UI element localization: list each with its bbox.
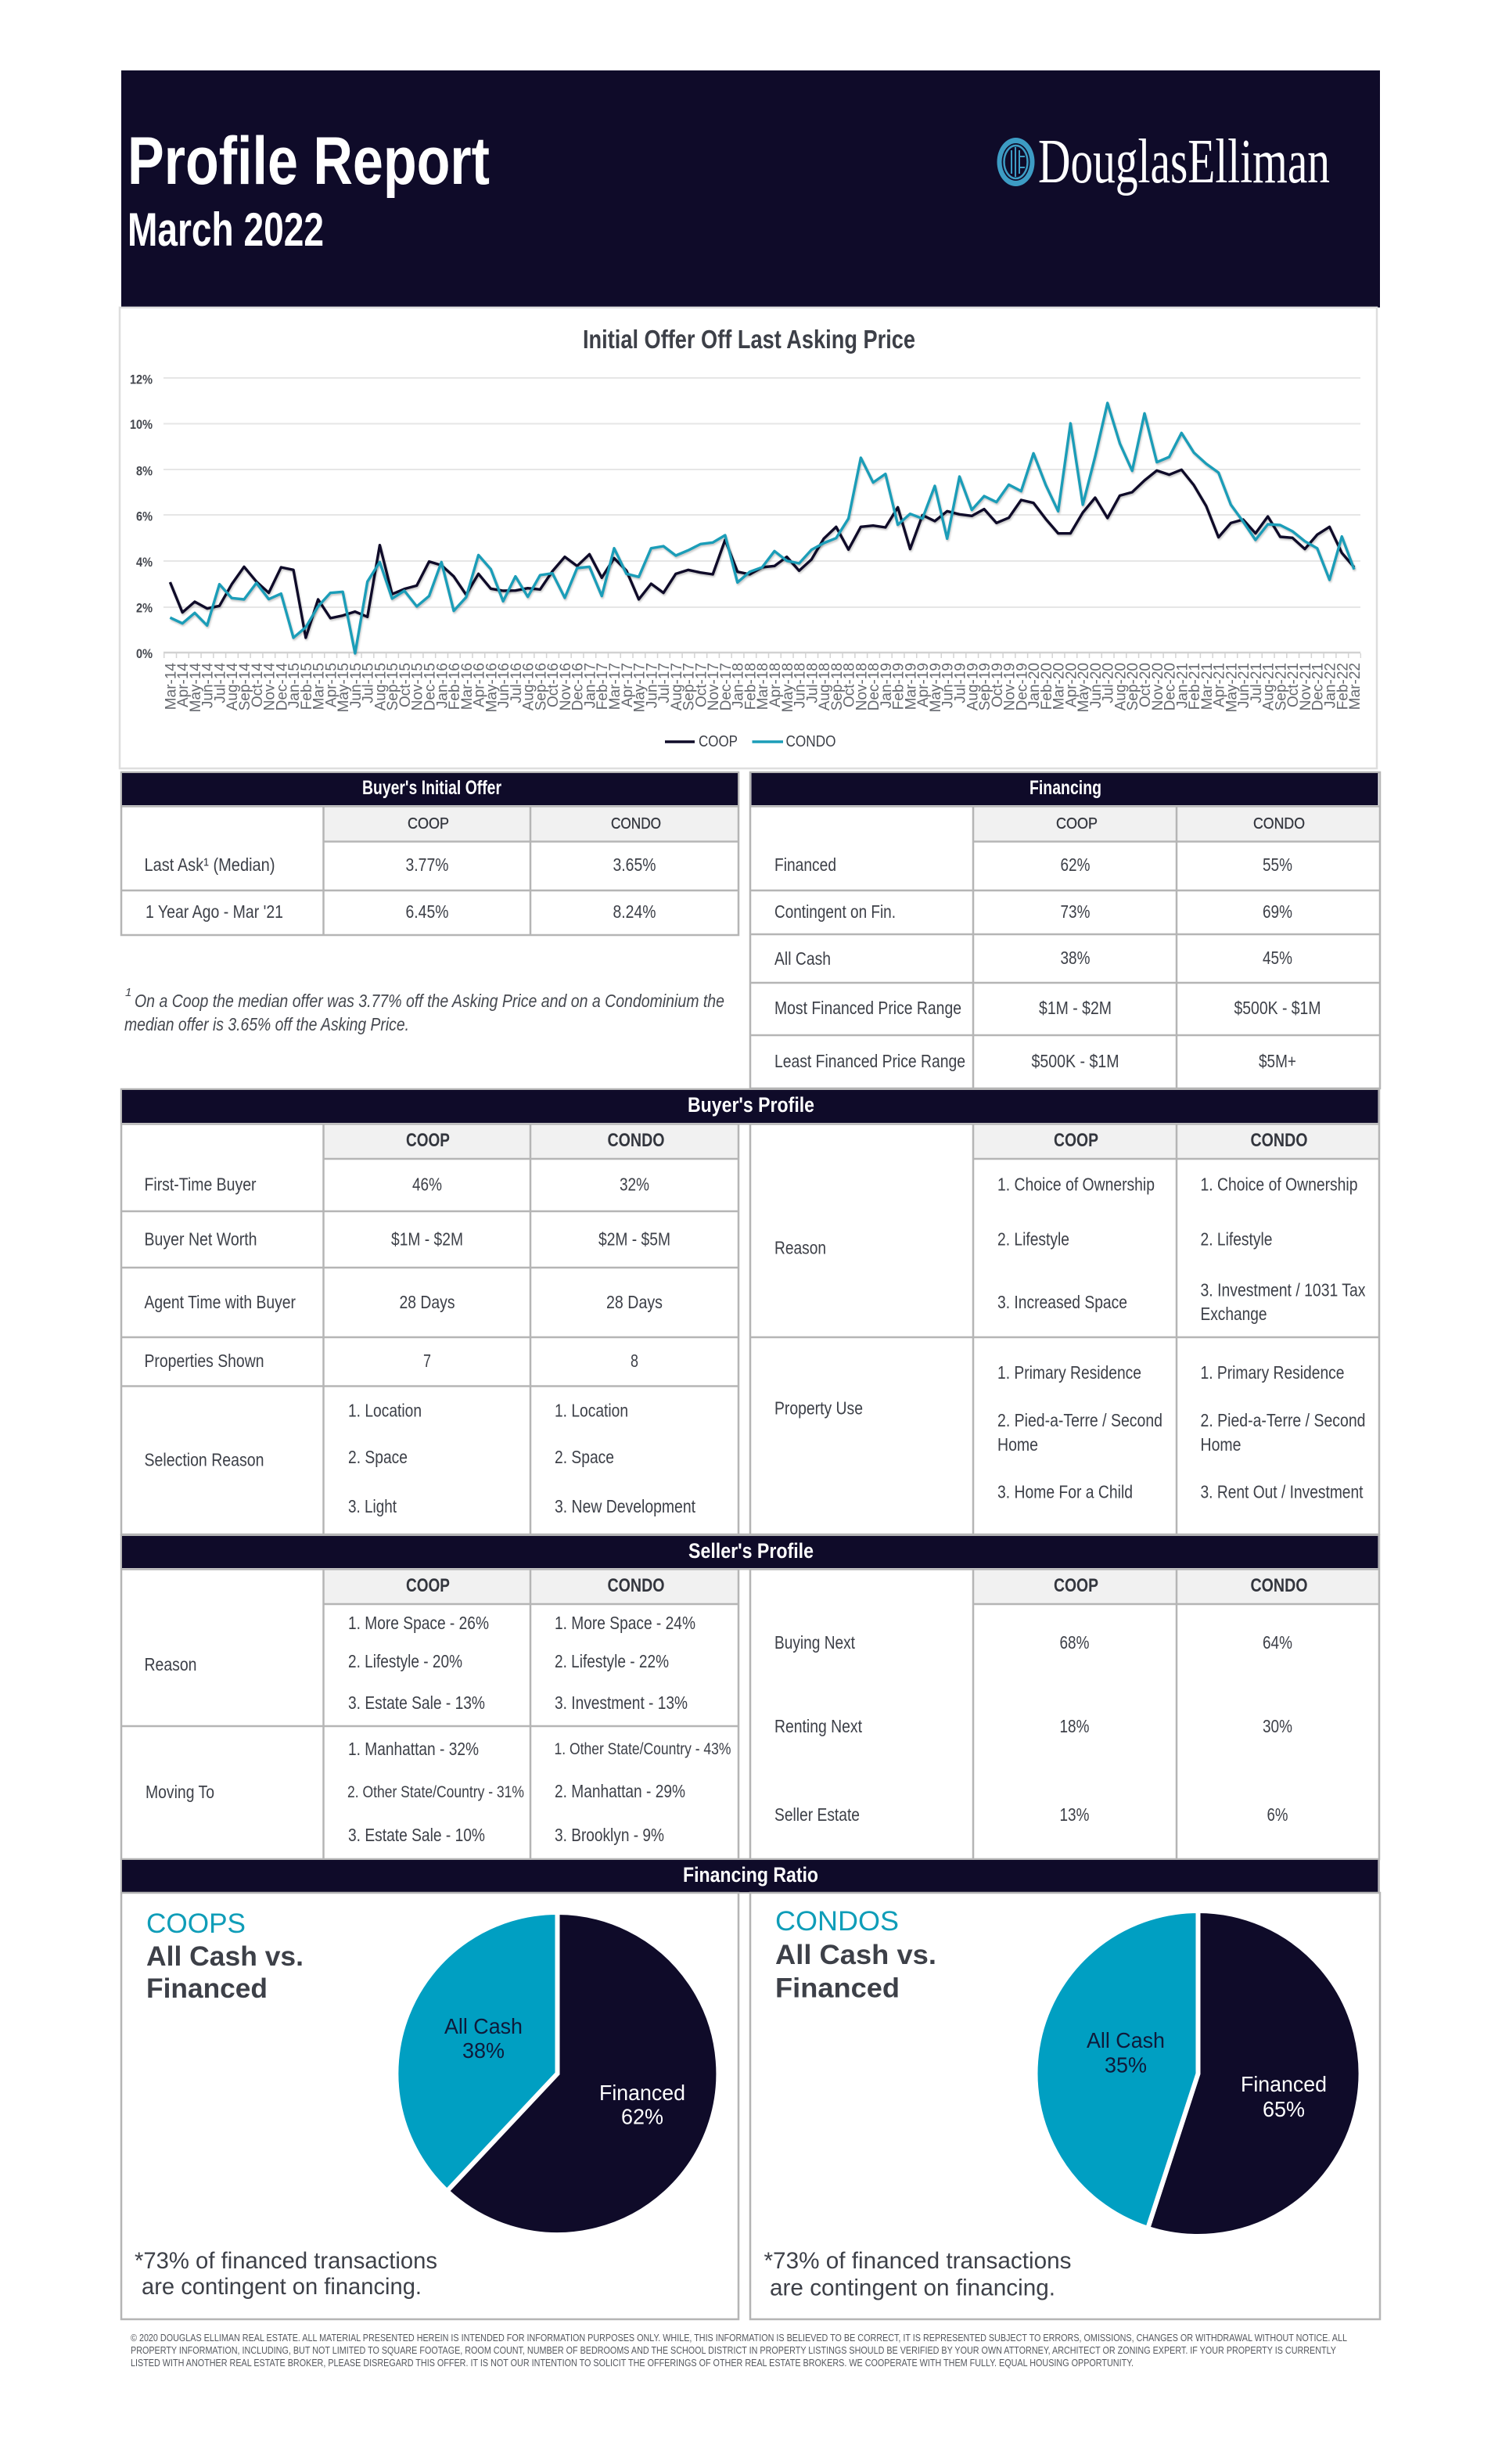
row: contingent	[774, 901, 1292, 922]
x axis month labels: May-15	[336, 663, 352, 712]
pie chart: coops: Financed	[599, 2081, 685, 2105]
panel: condos pie	[750, 1893, 1380, 2319]
row: reason: Exchange	[1200, 1304, 1267, 1324]
x axis month labels: Dec-18	[866, 663, 882, 710]
x axis month labels: Sep-16	[533, 663, 549, 710]
row: selection reason: 1. Location	[555, 1401, 628, 1421]
row: moving to: 2. Manhattan - 29%	[555, 1781, 685, 1801]
row: reason: 1. More Space - 24%	[555, 1613, 695, 1633]
x axis month labels: Sep-21	[1273, 663, 1289, 710]
x axis month labels: Mar-22	[1347, 663, 1364, 710]
x axis month labels: Aug-21	[1261, 663, 1277, 710]
x axis month labels: Jun-19	[940, 663, 957, 708]
row: property use: 3. Home For a Child	[997, 1482, 1133, 1502]
y axis labels: 12%	[130, 372, 153, 387]
row: first-time buyer: 46%	[412, 1174, 442, 1195]
x axis month labels: Mar-19	[903, 663, 919, 710]
line: CONDO series	[170, 403, 1354, 653]
y axis labels: 2%	[136, 601, 153, 616]
row: buying next	[774, 1632, 1292, 1653]
x axis month labels: Dec-20	[1162, 663, 1178, 710]
row: property use: Home	[1200, 1434, 1241, 1455]
panel: condos pie: are contingent on financing.	[770, 2275, 1055, 2300]
panel: Seller's Profile: COOP	[1054, 1575, 1098, 1596]
x axis month labels: Dec-19	[1014, 663, 1030, 710]
x axis month labels: Oct-17	[693, 663, 710, 707]
x axis month labels: Dec-17	[718, 663, 735, 710]
panel: Seller's Profile: CONDO	[1250, 1575, 1308, 1596]
header banner	[121, 70, 1380, 308]
x axis month labels: Nov-20	[1150, 663, 1166, 710]
panel: Buyer's Initial Offer table: CONDO	[611, 815, 661, 833]
row: property use	[774, 1362, 1366, 1502]
row: buying next: Buying Next	[774, 1632, 855, 1653]
heading: Financing Ratio	[683, 1863, 818, 1887]
x axis month labels: Feb-22	[1335, 663, 1351, 710]
row: moving to: 3. Brooklyn - 9%	[555, 1825, 664, 1845]
heading: Seller's Profile	[688, 1539, 814, 1563]
pie chart: condos: 35%	[1105, 2053, 1147, 2077]
row: 1 year ago	[146, 901, 656, 922]
panel: Buyer's Profile: CONDO	[1250, 1130, 1308, 1151]
panel: Buyer's Profile: COOP	[406, 1130, 450, 1151]
row: properties shown: 8	[631, 1351, 638, 1371]
x axis month labels: Oct-14	[250, 663, 266, 707]
panel: coops pie: *73% of financed transactions	[135, 2248, 437, 2274]
row: least financed: $5M+	[1259, 1051, 1296, 1071]
row: contingent: 73%	[1061, 901, 1091, 922]
row: most financed: $1M - $2M	[1039, 998, 1112, 1018]
panel: Financing Ratio	[121, 1859, 1380, 2319]
y axis labels: 6%	[136, 509, 153, 524]
x axis month labels: Jan-18	[731, 663, 747, 708]
x axis month labels: Aug-17	[669, 663, 685, 710]
panel: Seller's Profile: CONDO	[607, 1575, 665, 1596]
row: first-time buyer: 32%	[620, 1174, 649, 1195]
row: first-time buyer: First-Time Buyer	[144, 1174, 257, 1195]
row: renting next	[774, 1716, 1292, 1736]
x axis month labels: Nov-16	[558, 663, 574, 710]
row: buyer net worth: Buyer Net Worth	[144, 1229, 257, 1250]
x axis month labels: Apr-15	[323, 663, 340, 707]
panel: Buyer's Profile: COOP	[1054, 1130, 1098, 1151]
row: property use: 3. Rent Out / Investment	[1200, 1482, 1364, 1502]
x axis month labels: Aug-18	[817, 663, 833, 710]
row: agent time: 28 Days	[399, 1292, 455, 1312]
row: buyer net worth: $1M - $2M	[391, 1229, 463, 1250]
x axis month labels: Jan-16	[434, 663, 451, 708]
x axis month labels: Feb-17	[595, 663, 611, 710]
x axis month labels: Jun-16	[496, 663, 512, 708]
x axis month labels: Jun-15	[348, 663, 365, 708]
subtitle: March 2022: March 2022	[128, 203, 324, 256]
row: property use: 1. Primary Residence	[997, 1362, 1141, 1383]
x axis month labels: Nov-17	[706, 663, 722, 710]
row: property use: 1. Primary Residence	[1200, 1362, 1344, 1383]
x axis month labels: Apr-19	[915, 663, 932, 707]
x axis month labels: Apr-18	[767, 663, 784, 707]
footnote: On a Coop the median offer was 3.77% off the Asking Price and on a Condominium the	[135, 991, 724, 1011]
heading: Buyer's Initial Offer	[362, 777, 501, 799]
row: most financed	[774, 998, 1321, 1018]
x axis month labels: Jan-19	[879, 663, 895, 708]
row: most financed: Most Financed Price Range	[774, 998, 961, 1018]
x axis month labels: Jun-14	[200, 663, 217, 708]
y axis labels: 8%	[136, 464, 153, 479]
row: selection reason: 3. New Development	[555, 1496, 696, 1516]
x axis month labels: Jun-17	[644, 663, 660, 708]
x axis month labels: Jul-18	[804, 663, 821, 703]
row: reason	[774, 1174, 1366, 1324]
row: moving to: 1. Manhattan - 32%	[348, 1739, 479, 1759]
x axis month labels: Feb-19	[891, 663, 907, 710]
x axis month labels: Sep-14	[237, 663, 253, 710]
panel: line chart Initial Offer Off Last Asking Price	[120, 308, 1377, 768]
x axis month labels: Jan-22	[1322, 663, 1339, 708]
row: reason: 3. Investment / 1031 Tax	[1200, 1280, 1366, 1300]
row: seller estate: Seller Estate	[774, 1804, 860, 1825]
row: reason: 3. Estate Sale - 13%	[348, 1692, 485, 1713]
row: reason: 1. Choice of Ownership	[997, 1174, 1155, 1195]
row: selection reason: Selection Reason	[144, 1450, 264, 1470]
x axis month labels: Sep-17	[681, 663, 698, 710]
line: COOP series	[170, 469, 1354, 638]
panel: condos pie: CONDOS	[775, 1906, 899, 1937]
x axis month labels: Apr-20	[1063, 663, 1080, 707]
panel: condos pie: Financed	[775, 1973, 900, 2003]
x axis month labels: Jun-20	[1088, 663, 1105, 708]
panel: Seller's Profile	[120, 1535, 1380, 1859]
x axis month labels: May-14	[188, 663, 204, 712]
panel: Financing table: CONDO	[1253, 815, 1305, 833]
x axis month labels: Aug-14	[225, 663, 241, 710]
x axis month labels: Sep-15	[385, 663, 401, 710]
x axis month labels: Mar-21	[1199, 663, 1216, 710]
row: moving to: 1. Other State/Country - 43%	[554, 1740, 731, 1758]
row: seller estate: 13%	[1059, 1804, 1089, 1825]
x axis month labels: May-18	[780, 663, 796, 712]
row: properties shown: 7	[423, 1351, 431, 1371]
row: agent time: Agent Time with Buyer	[144, 1292, 296, 1312]
legal disclaimer: PROPERTY INFORMATION, INCLUDING, BUT NOT LIMITED TO SQUARE FOOTAGE, ROOM COUNT, NUMBER OF BEDROOMS AND THE SCHOOL DISTRICT IN PROPERTY LISTINGS SHOULD BE VERIFIED BY YOUR OWN ATTORNEY, ARCHITECT OR ZONING EXPERT. IF YOUR PROPERTY IS CURRENTLY	[131, 2345, 1337, 2356]
x axis month labels: Jan-20	[1026, 663, 1043, 708]
row: reason: Reason	[144, 1654, 197, 1674]
row: renting next: 30%	[1263, 1716, 1292, 1736]
row: moving to: 3. Estate Sale - 10%	[348, 1825, 485, 1845]
x axis month labels: Oct-19	[990, 663, 1006, 707]
x axis month labels: Nov-15	[410, 663, 426, 710]
x axis month labels: Jan-21	[1174, 663, 1191, 708]
legal disclaimer: LISTED WITH ANOTHER REAL ESTATE BROKER, PLEASE DISREGARD THIS OFFER. IT IS NOT OUR INTENTION TO SOLICIT THE OFFERINGS OF OTHER REAL ESTATE BROKERS. WE COOPERATE WITH THEM FULLY. EQUAL HOUSING OPPORTUNITY.	[131, 2358, 1134, 2369]
x axis month labels: Feb-16	[447, 663, 463, 710]
row: financed: 62%	[1061, 854, 1091, 875]
x axis month labels	[163, 663, 1364, 712]
footnote: median offer is 3.65% off the Asking Price.	[124, 1014, 409, 1034]
y axis labels: 4%	[136, 555, 153, 570]
x axis month labels: Apr-17	[620, 663, 636, 707]
row: contingent: Contingent on Fin.	[774, 901, 896, 922]
x axis month labels: Jul-20	[1101, 663, 1117, 703]
row: contingent: 69%	[1263, 901, 1292, 922]
x axis month labels: Apr-16	[472, 663, 488, 707]
x axis month labels: Aug-16	[521, 663, 537, 710]
x axis month labels: Sep-19	[977, 663, 994, 710]
pie chart: condos: Financed	[1241, 2072, 1327, 2096]
pie chart: coops	[396, 1912, 718, 2235]
chart legend	[665, 733, 835, 750]
x axis month labels: Jun-18	[792, 663, 809, 708]
row: agent time	[144, 1292, 663, 1312]
x axis month labels: Oct-21	[1285, 663, 1302, 707]
row: reason: 2. Lifestyle - 20%	[348, 1651, 462, 1671]
row: last ask: 3.77%	[405, 854, 449, 875]
logo wordmark: DouglasElliman	[1038, 128, 1330, 196]
x axis month labels: May-17	[632, 663, 648, 712]
row: renting next: Renting Next	[774, 1716, 863, 1736]
row: all cash: All Cash	[774, 948, 831, 969]
row: all cash: 38%	[1061, 948, 1091, 968]
panel: Financing table: COOP	[1056, 815, 1098, 833]
row: property use: Property Use	[774, 1397, 863, 1418]
x axis month labels: Jul-17	[656, 663, 673, 703]
x axis month labels: Dec-14	[274, 663, 290, 710]
pie chart: coops: All Cash	[444, 2014, 523, 2038]
chart title: Initial Offer Off Last Asking Price	[583, 325, 915, 354]
x axis month labels: Oct-18	[842, 663, 858, 707]
row: property use: 2. Pied-a-Terre / Second	[1200, 1410, 1366, 1430]
row: financed: Financed	[774, 854, 836, 875]
row: buyer net worth	[144, 1229, 670, 1250]
row: selection reason: 2. Space	[348, 1447, 408, 1467]
panel: Buyer's Profile: CONDO	[607, 1130, 665, 1151]
row: most financed: $500K - $1M	[1234, 998, 1321, 1018]
panel: Buyer's Initial Offer table	[120, 772, 738, 935]
x axis month labels: Mar-14	[163, 663, 179, 710]
row: reason: 2. Lifestyle	[997, 1229, 1069, 1250]
x axis month labels: Oct-16	[545, 663, 562, 707]
row: selection reason	[144, 1401, 696, 1516]
pie chart: condos	[1036, 1911, 1361, 2236]
row: selection reason: 2. Space	[555, 1447, 614, 1467]
x axis month labels: Jun-21	[1236, 663, 1252, 708]
x axis month labels: May-21	[1224, 663, 1240, 712]
row: first-time buyer	[144, 1174, 649, 1195]
x axis month labels: Jul-21	[1249, 663, 1265, 703]
row: least financed: $500K - $1M	[1031, 1051, 1119, 1071]
row: last ask	[144, 854, 656, 875]
x axis month labels: May-19	[928, 663, 944, 712]
row: moving to: Moving To	[146, 1782, 214, 1802]
row: financed: 55%	[1263, 854, 1292, 875]
row: renting next: 18%	[1059, 1716, 1089, 1736]
row: properties shown	[144, 1351, 638, 1371]
x axis month labels: Aug-20	[1112, 663, 1130, 710]
x axis month labels: Jan-15	[286, 663, 303, 708]
x axis month labels: Nov-14	[261, 663, 278, 710]
x axis month labels: Mar-15	[311, 663, 328, 710]
x axis month labels: Dec-15	[422, 663, 438, 710]
row: last ask: Last Ask¹ (Median)	[144, 854, 275, 875]
row: reason: 1. More Space - 26%	[348, 1613, 489, 1633]
row: financed	[774, 854, 1292, 875]
x axis month labels: Jan-17	[582, 663, 599, 708]
x axis month labels: Jul-16	[508, 663, 525, 703]
pie chart: condos: 65%	[1263, 2097, 1305, 2121]
row: least financed	[774, 1051, 1296, 1071]
heading: Buyer's Profile	[688, 1093, 814, 1117]
x axis month labels: Dec-21	[1310, 663, 1327, 710]
x axis month labels: Mar-18	[755, 663, 771, 710]
panel: coops pie: All Cash vs.	[146, 1941, 304, 1972]
panel: Buyer's Initial Offer table: COOP	[408, 815, 449, 833]
panel: Seller's Profile: COOP	[406, 1575, 450, 1596]
legal disclaimer	[131, 2333, 1347, 2369]
row: buying next: 64%	[1263, 1632, 1292, 1653]
x axis month labels: Feb-18	[742, 663, 759, 710]
chart legend: COOP	[699, 733, 738, 750]
x axis month labels: Jul-19	[953, 663, 968, 703]
row: all cash: 45%	[1263, 948, 1292, 968]
x axis month labels: Apr-14	[175, 663, 192, 707]
row: property use: 2. Pied-a-Terre / Second	[997, 1410, 1162, 1430]
x axis month labels: Jul-15	[361, 663, 377, 703]
pie chart: coops: 38%	[462, 2038, 505, 2063]
row: agent time: 28 Days	[606, 1292, 663, 1312]
x axis month labels: Nov-18	[853, 663, 870, 710]
x axis month labels: Feb-20	[1039, 663, 1055, 710]
row: reason: 2. Lifestyle	[1200, 1229, 1272, 1250]
row: least financed: Least Financed Price Range	[774, 1051, 965, 1071]
title: Profile Report: Profile Report	[128, 124, 490, 199]
footnote: 1	[125, 986, 131, 999]
row: seller estate	[774, 1804, 1288, 1825]
row: buying next: 68%	[1059, 1632, 1089, 1653]
row: moving to: 2. Other State/Country - 31%	[347, 1783, 524, 1801]
x axis month labels: Nov-19	[1002, 663, 1019, 710]
x axis month labels: Mar-16	[459, 663, 476, 710]
row: reason: Reason	[774, 1238, 826, 1258]
x axis month labels: Oct-15	[397, 663, 414, 707]
row: seller estate: 6%	[1267, 1804, 1288, 1825]
row: reason: 2. Lifestyle - 22%	[555, 1651, 669, 1671]
x axis month labels: Nov-21	[1298, 663, 1314, 710]
panel: condos pie: *73% of financed transactions	[764, 2248, 1072, 2274]
x axis month labels: Apr-21	[1212, 663, 1228, 707]
x axis month labels: Mar-20	[1051, 663, 1068, 710]
panel: Buyer's Profile	[120, 1089, 1380, 1534]
row: 1 year ago: 1 Year Ago - Mar '21	[146, 901, 283, 922]
x axis month labels: Sep-20	[1125, 663, 1141, 710]
icon: Douglas Elliman emblem	[997, 138, 1034, 186]
row: all cash	[774, 948, 1292, 969]
row: selection reason: 3. Light	[348, 1496, 397, 1516]
x axis month labels: Feb-15	[299, 663, 315, 710]
row: 1 year ago: 6.45%	[405, 901, 449, 922]
x axis month labels: May-20	[1076, 663, 1092, 712]
row: property use: Home	[997, 1434, 1038, 1455]
panel: coops pie: COOPS	[146, 1908, 246, 1939]
footnote	[124, 986, 724, 1034]
row: reason: 1. Choice of Ownership	[1200, 1174, 1358, 1195]
x axis month labels: Aug-19	[965, 663, 981, 710]
row: 1 year ago: 8.24%	[613, 901, 656, 922]
row: reason	[144, 1613, 695, 1713]
row: selection reason: 1. Location	[348, 1401, 422, 1421]
panel: condos pie: All Cash vs.	[775, 1940, 936, 1970]
row: reason: 3. Increased Space	[997, 1292, 1127, 1312]
x axis month labels: Jul-14	[213, 663, 228, 703]
panel: coops pie: are contingent on financing.	[142, 2274, 422, 2300]
legal disclaimer: © 2020 DOUGLAS ELLIMAN REAL ESTATE. ALL MATERIAL PRESENTED HEREIN IS INTENDED FOR INFORMATION PURPOSES ONLY. WHILE, THIS INFORMATION IS BELIEVED TO BE CORRECT, IT IS REPRESENTED SUBJECT TO ERRORS, OMISSIONS, CHANGES OR WITHDRAWAL WITHOUT NOTICE. ALL	[131, 2333, 1347, 2343]
x axis month labels: Oct-20	[1137, 663, 1154, 707]
pie chart: condos: All Cash	[1087, 2028, 1165, 2052]
panel: coops pie	[121, 1893, 738, 2319]
y axis labels	[130, 372, 153, 661]
x axis month labels: Mar-17	[607, 663, 623, 710]
x axis month labels: Feb-21	[1187, 663, 1203, 710]
y axis labels: 10%	[130, 417, 153, 432]
chart legend: CONDO	[785, 733, 835, 750]
x axis month labels: Sep-18	[829, 663, 846, 710]
x axis month labels: Aug-15	[372, 663, 389, 710]
pie chart: coops: 62%	[621, 2105, 663, 2129]
y axis labels: 0%	[136, 646, 153, 661]
panel: coops pie: Financed	[146, 1973, 268, 2004]
row: moving to	[146, 1739, 731, 1845]
row: reason: 3. Investment - 13%	[555, 1692, 688, 1713]
x axis month labels: Dec-16	[570, 663, 587, 710]
panel: Financing table	[749, 772, 1380, 1088]
row: buyer net worth: $2M - $5M	[598, 1229, 670, 1250]
row: properties shown: Properties Shown	[144, 1351, 264, 1371]
heading: Financing	[1029, 777, 1101, 799]
x axis month labels: May-16	[483, 663, 500, 712]
row: last ask: 3.65%	[613, 854, 656, 875]
